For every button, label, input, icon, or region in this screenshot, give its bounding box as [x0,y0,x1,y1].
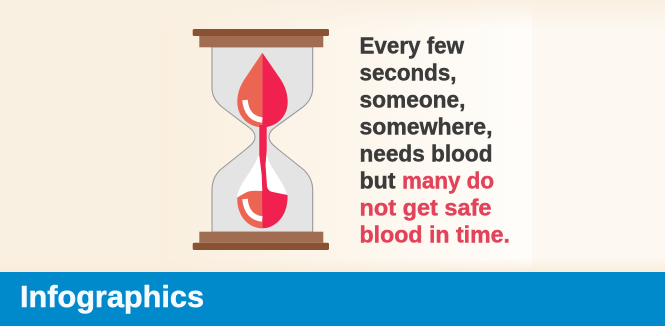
footer banner [0,272,665,326]
bottom blood pool [237,191,288,228]
top frame [193,29,329,47]
headline text: many do [402,168,494,194]
headline text: but [360,168,396,194]
hourglass glass [212,47,313,232]
headline text: seconds, [360,60,456,86]
bottom frame [193,232,329,250]
headline text: needs blood [360,140,492,166]
headline text: not get safe [360,194,492,220]
pool highlight [245,199,262,219]
headline text: Every few [360,32,465,58]
blood stream [259,125,275,194]
headline text [360,32,510,248]
banner title: Infographics [20,279,204,314]
headline text: someone, [360,86,466,112]
hourglass [193,29,329,250]
lower white drop outline [237,156,288,198]
top blood drop [237,53,288,127]
drop highlight [245,100,262,120]
headline text: somewhere, [360,114,492,140]
headline text: blood in time. [360,222,510,248]
